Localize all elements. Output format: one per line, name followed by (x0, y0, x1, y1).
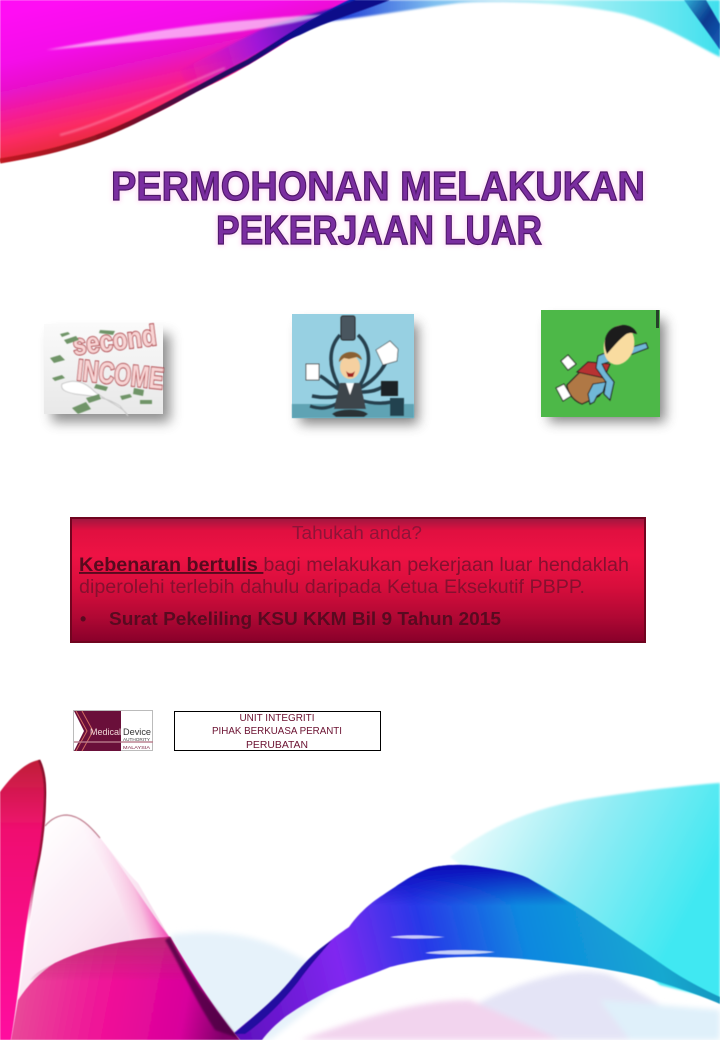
panel body text: diperolehi terlebih dahulu daripada Ketua Eksekutif PBPP. (79, 577, 585, 598)
title line 1: PERMOHONAN MELAKUKAN (111, 163, 645, 209)
panel body text (79, 555, 629, 598)
label box: unit integriti: PIHAK BERKUASA PERANTI (212, 725, 342, 737)
image: multitasking worker (292, 314, 418, 424)
pink veil (18, 815, 170, 1000)
cyan swoosh (450, 783, 720, 1000)
image: flying hero (541, 310, 665, 422)
blue wave (234, 865, 720, 1040)
image: second income (44, 320, 170, 422)
panel body text: Kebenaran bertulis bagi melakukan pekerjaan luar hendaklah (79, 555, 629, 576)
bottom decorative waves (0, 760, 720, 1040)
red leaf (0, 760, 45, 1040)
pale ribbons (170, 932, 720, 1040)
title line 2: PEKERJAAN LUAR (216, 207, 542, 253)
logo: medical device authority: Device (123, 727, 151, 738)
magenta dome (11, 937, 240, 1040)
logo: medical device authority: Medical (90, 727, 121, 738)
second income wordmark (71, 320, 165, 396)
title (111, 163, 645, 253)
top decorative wave (0, 0, 720, 162)
label box: unit integriti: UNIT INTEGRITI (240, 712, 314, 724)
envelopes (561, 355, 576, 370)
panel heading: Tahukah anda? (292, 523, 422, 543)
title line 2: PEKERJAAN LUAR (216, 207, 542, 253)
panel bullet: • (80, 609, 86, 629)
panel bullet: Surat Pekeliling KSU KKM Bil 9 Tahun 2015 (109, 609, 501, 629)
logo: medical device authority (74, 710, 153, 751)
hero satchel (567, 365, 611, 404)
logo: medical device authority: AUTHORITY (123, 737, 151, 743)
panel: did you know (71, 518, 645, 642)
second income wordmark: INCOME (75, 354, 165, 396)
title line 1: PERMOHONAN MELAKUKAN (111, 163, 645, 209)
second income wordmark: second (71, 320, 158, 362)
label box: unit integriti (174, 712, 380, 751)
arms (310, 335, 392, 408)
hero head (599, 322, 639, 368)
label box: unit integriti: PERUBATAN (246, 739, 308, 751)
hero body and legs (588, 343, 648, 404)
logo: medical device authority: MALAYSIA (123, 745, 151, 751)
